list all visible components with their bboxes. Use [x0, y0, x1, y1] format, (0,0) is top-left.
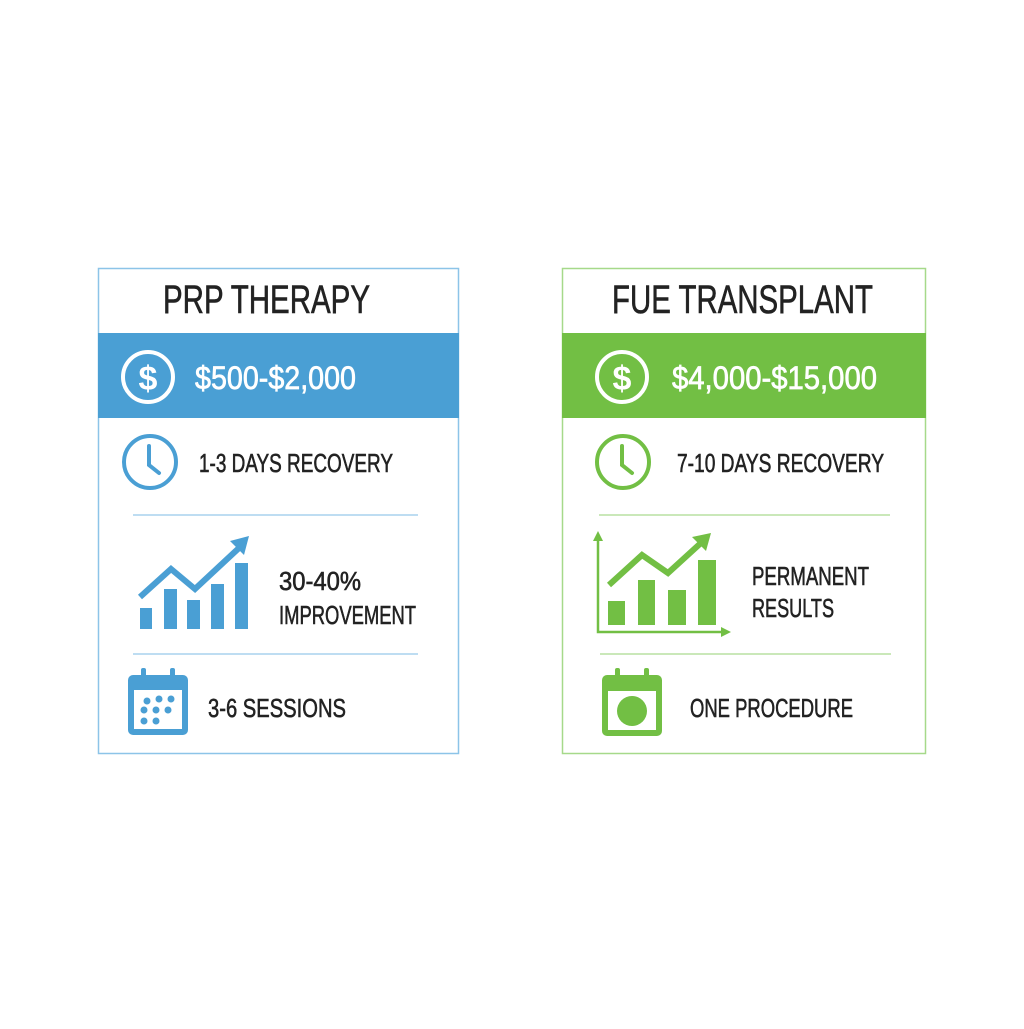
icon: calendar [602, 668, 662, 736]
price band [562, 333, 926, 418]
icon: dollar [123, 352, 173, 402]
heading: PRP THERAPY: PRP THERAPY [163, 278, 370, 322]
icon: calendar [128, 668, 188, 735]
text: sessions: 3-6 SESSIONS [208, 693, 346, 723]
panel: PRP therapy [98, 268, 459, 754]
icon: dollar [597, 352, 647, 402]
text: permanent results: RESULTS [752, 593, 834, 623]
icon: growth chart with axes [593, 531, 731, 637]
icon: dollar: $ [613, 360, 632, 398]
text: permanent results: PERMANENT [752, 561, 869, 591]
text: improvement [279, 566, 416, 630]
text: permanent results [752, 561, 869, 623]
price text: $4,000-$15,000 [672, 360, 877, 396]
price band [98, 333, 459, 418]
text: recovery: 7-10 DAYS RECOVERY [677, 448, 884, 478]
panel: FUE transplant [562, 268, 926, 754]
icon: growth chart [140, 536, 249, 629]
text: improvement: 30-40% [279, 566, 361, 596]
icon: dollar: $ [139, 360, 158, 398]
text: improvement: IMPROVEMENT [279, 600, 416, 630]
text: recovery: 1-3 DAYS RECOVERY [199, 448, 393, 478]
icon: clock [597, 436, 649, 488]
icon: clock [124, 436, 176, 488]
heading: FUE TRANSPLANT: FUE TRANSPLANT [612, 278, 873, 322]
price text: $500-$2,000 [195, 360, 356, 396]
text: one procedure: ONE PROCEDURE [690, 693, 853, 723]
